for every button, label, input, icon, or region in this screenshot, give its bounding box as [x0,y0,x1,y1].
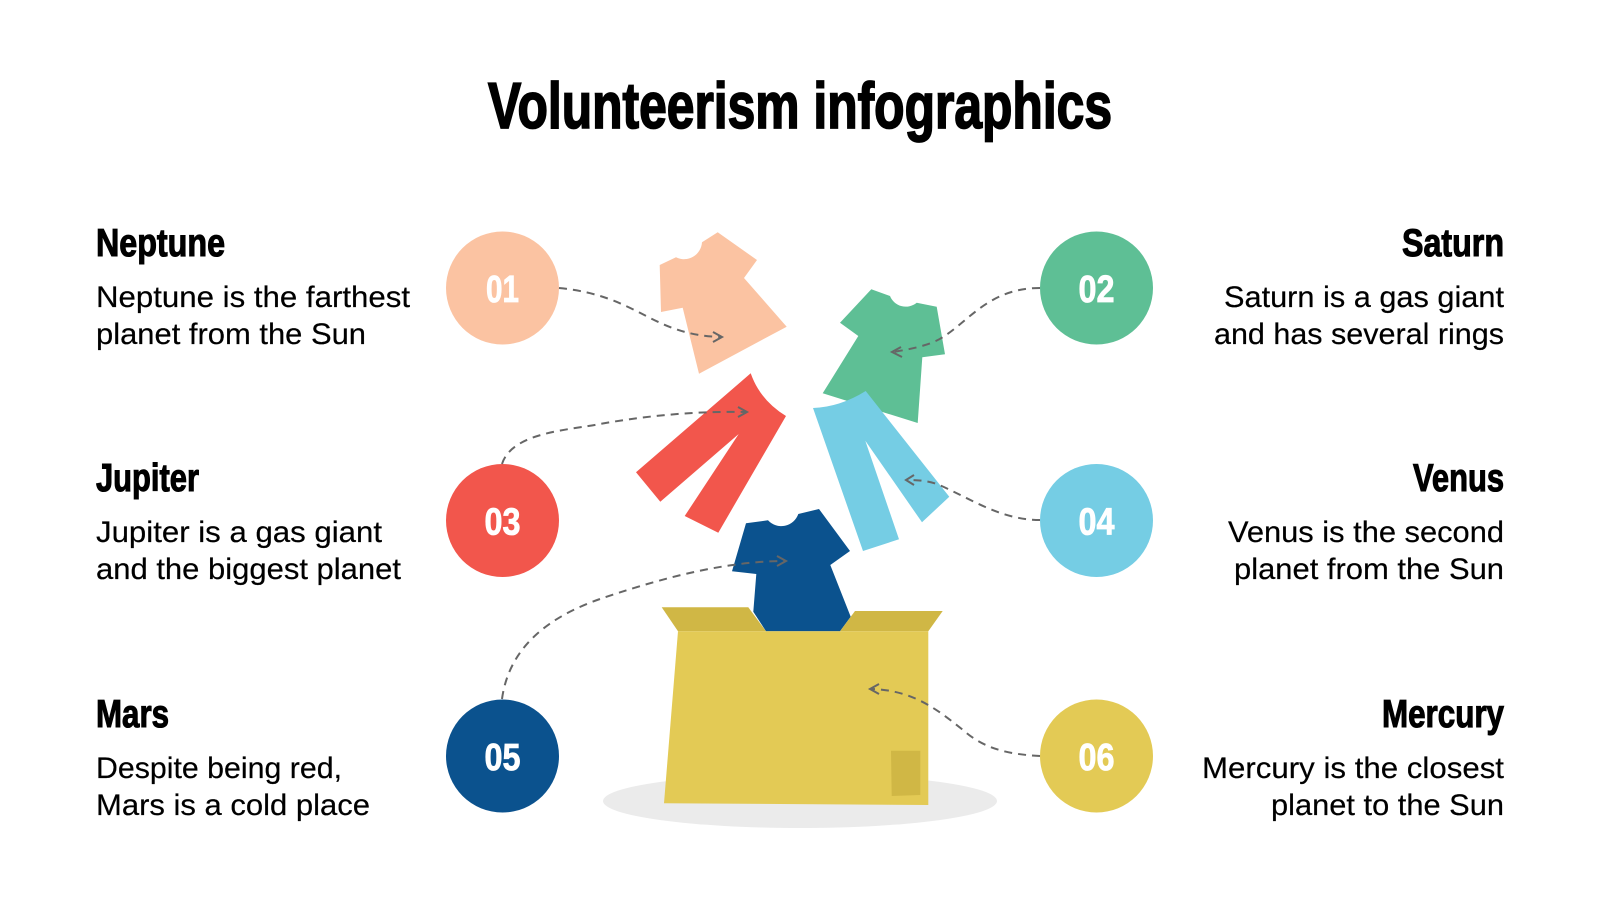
box shadow [603,774,997,828]
item 01: Neptune: Neptune is the farthest [96,281,411,314]
badge 01 [446,232,559,344]
arrow 05 to navy shirt [502,556,786,699]
badge 02 [1040,232,1153,344]
item 04: Venus [1228,457,1504,586]
item 06: Mercury: planet to the Sun [1271,789,1504,822]
item 04: Venus: planet from the Sun [1234,553,1504,586]
badge 06: 06 [1078,737,1114,779]
item 05: Mars: Mars [96,693,169,736]
item 01: Neptune: Neptune [96,222,225,265]
item 05: Mars: Despite being red, [96,752,342,785]
badge 02: 02 [1078,269,1114,311]
box front [664,631,928,805]
trousers: red [636,373,786,533]
badge 06 [1040,700,1153,812]
item 03: Jupiter: Jupiter is a gas giant [96,516,383,549]
badge 03: 03 [484,502,520,544]
badge 05 [446,700,559,812]
arrow 03 to red trousers [502,407,747,464]
item 01: Neptune: planet from the Sun [96,318,366,351]
arrow 01 to peach shirt [559,288,722,342]
shirt: peach [660,232,787,374]
item 02: Saturn: and has several rings [1214,318,1504,351]
item 03: Jupiter [96,457,402,586]
item 06: Mercury [1202,693,1505,822]
item 04: Venus: Venus [1413,457,1504,500]
item 02: Saturn [1214,222,1505,351]
trousers: light blue [813,391,949,551]
badge 04: 04 [1078,502,1114,544]
badge 05: 05 [484,737,520,779]
illustration: box of clothes [603,232,997,828]
item 04: Venus: Venus is the second [1228,516,1504,549]
item 01: Neptune [96,222,411,351]
shirt: green [823,289,945,423]
shirt: navy [732,509,851,631]
item 05: Mars: Mars is a cold place [96,789,370,822]
badge 04 [1040,464,1153,577]
item 06: Mercury: Mercury [1382,693,1504,736]
item 06: Mercury: Mercury is the closest [1202,752,1505,785]
item 02: Saturn: Saturn [1402,222,1504,265]
box label [891,751,920,796]
arrow 02 to green shirt [892,288,1040,357]
box left flap [662,607,766,631]
item 02: Saturn: Saturn is a gas giant [1224,281,1505,314]
arrow 04 to blue trousers [906,475,1040,520]
arrow 06 to box [870,684,1040,756]
box right flap [840,611,943,631]
item 03: Jupiter: Jupiter [96,457,199,500]
badge 03 [446,464,559,577]
badge 01: 01 [486,269,519,311]
item 05: Mars [96,693,370,822]
title: Volunteerism infographics [488,69,1112,142]
item 03: Jupiter: and the biggest planet [96,553,402,586]
